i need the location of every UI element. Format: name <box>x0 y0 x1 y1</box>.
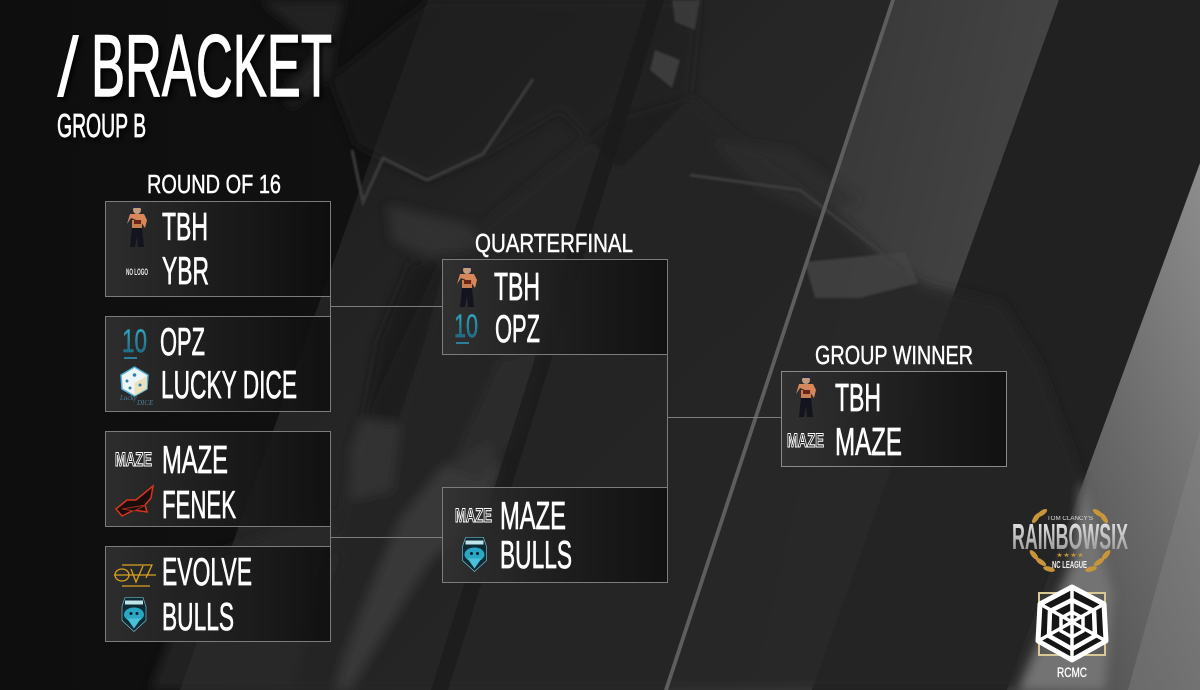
panel: quarterfinal TBH vs OPZ <box>442 260 668 354</box>
panel: quarterfinal MAZE vs BULLS <box>442 488 668 582</box>
logo: Rainbow Six NC League: ★★★★ <box>1056 552 1084 559</box>
icon: no logo: NO LOGO <box>126 267 148 277</box>
logo: RCMC web <box>1038 587 1106 660</box>
team name: TBH: TBH <box>162 206 208 249</box>
logo: Rainbow Six NC League: NC LEAGUE <box>1052 560 1087 571</box>
icon: OPZ logo: 10 <box>454 308 478 344</box>
title <box>57 16 332 115</box>
team name: TBH: TBH <box>835 377 881 420</box>
icon: TBH logo <box>127 205 147 247</box>
icon: BULLS logo <box>122 598 146 632</box>
icon: BULLS logo <box>462 538 486 572</box>
icon: MAZE logo: MAZE <box>455 506 492 527</box>
logo: Rainbow Six NC League <box>1012 508 1128 573</box>
icon: Lucky Dice logo: Lucky <box>119 394 138 402</box>
team name: OPZ: OPZ <box>160 321 205 364</box>
title: BRACKET <box>91 16 332 115</box>
background: soldier detail <box>352 0 918 298</box>
icon: MAZE logo: MAZE <box>115 450 152 471</box>
team name: FENEK: FENEK <box>162 484 236 527</box>
icon: OPZ logo <box>454 308 478 344</box>
heading: quarterfinal: QUARTERFINAL <box>475 228 633 258</box>
team name: OPZ: OPZ <box>495 308 540 351</box>
team name: MAZE: MAZE <box>835 421 902 464</box>
subtitle: group: GROUP B <box>57 107 146 144</box>
dark strap band <box>431 0 664 690</box>
icon: Lucky Dice logo: DICE <box>136 399 154 407</box>
icon: FENEK logo <box>116 486 153 516</box>
team name: YBR: YBR <box>162 250 209 293</box>
panel: group winner TBH vs MAZE <box>782 372 1006 466</box>
icon: OPZ logo: 10 <box>122 323 147 359</box>
label: RCMC: RCMC <box>1057 664 1087 680</box>
icon: TBH logo <box>457 265 477 307</box>
bracket connector lines <box>330 297 781 546</box>
icon: Lucky Dice logo <box>119 367 154 407</box>
panel: match OPZ vs Lucky Dice <box>106 316 330 412</box>
heading: round of 16: ROUND OF 16 <box>147 169 281 199</box>
title: / <box>57 20 80 114</box>
heading: group winner: GROUP WINNER <box>815 340 973 370</box>
team name: BULLS: BULLS <box>500 534 572 577</box>
icon: TBH logo <box>796 375 816 417</box>
icon: MAZE logo: MAZE <box>787 431 824 452</box>
icon: EVOLVE logo <box>114 565 156 586</box>
panel: match MAZE vs FENEK <box>106 432 330 527</box>
team name: MAZE: MAZE <box>162 439 228 482</box>
team name: MAZE: MAZE <box>500 495 566 538</box>
thin diagonal light stripe <box>664 0 895 690</box>
team name: Lucky Dice: LUCKY DICE <box>161 364 297 407</box>
panel: match EVOLVE vs BULLS <box>106 546 330 642</box>
logo: Rainbow Six NC League: TOM CLANCY'S <box>1047 516 1093 522</box>
team name: TBH: TBH <box>494 266 540 309</box>
team name: BULLS: BULLS <box>162 596 234 639</box>
panel: match TBH vs YBR <box>106 202 330 296</box>
team name: EVOLVE: EVOLVE <box>162 551 252 594</box>
